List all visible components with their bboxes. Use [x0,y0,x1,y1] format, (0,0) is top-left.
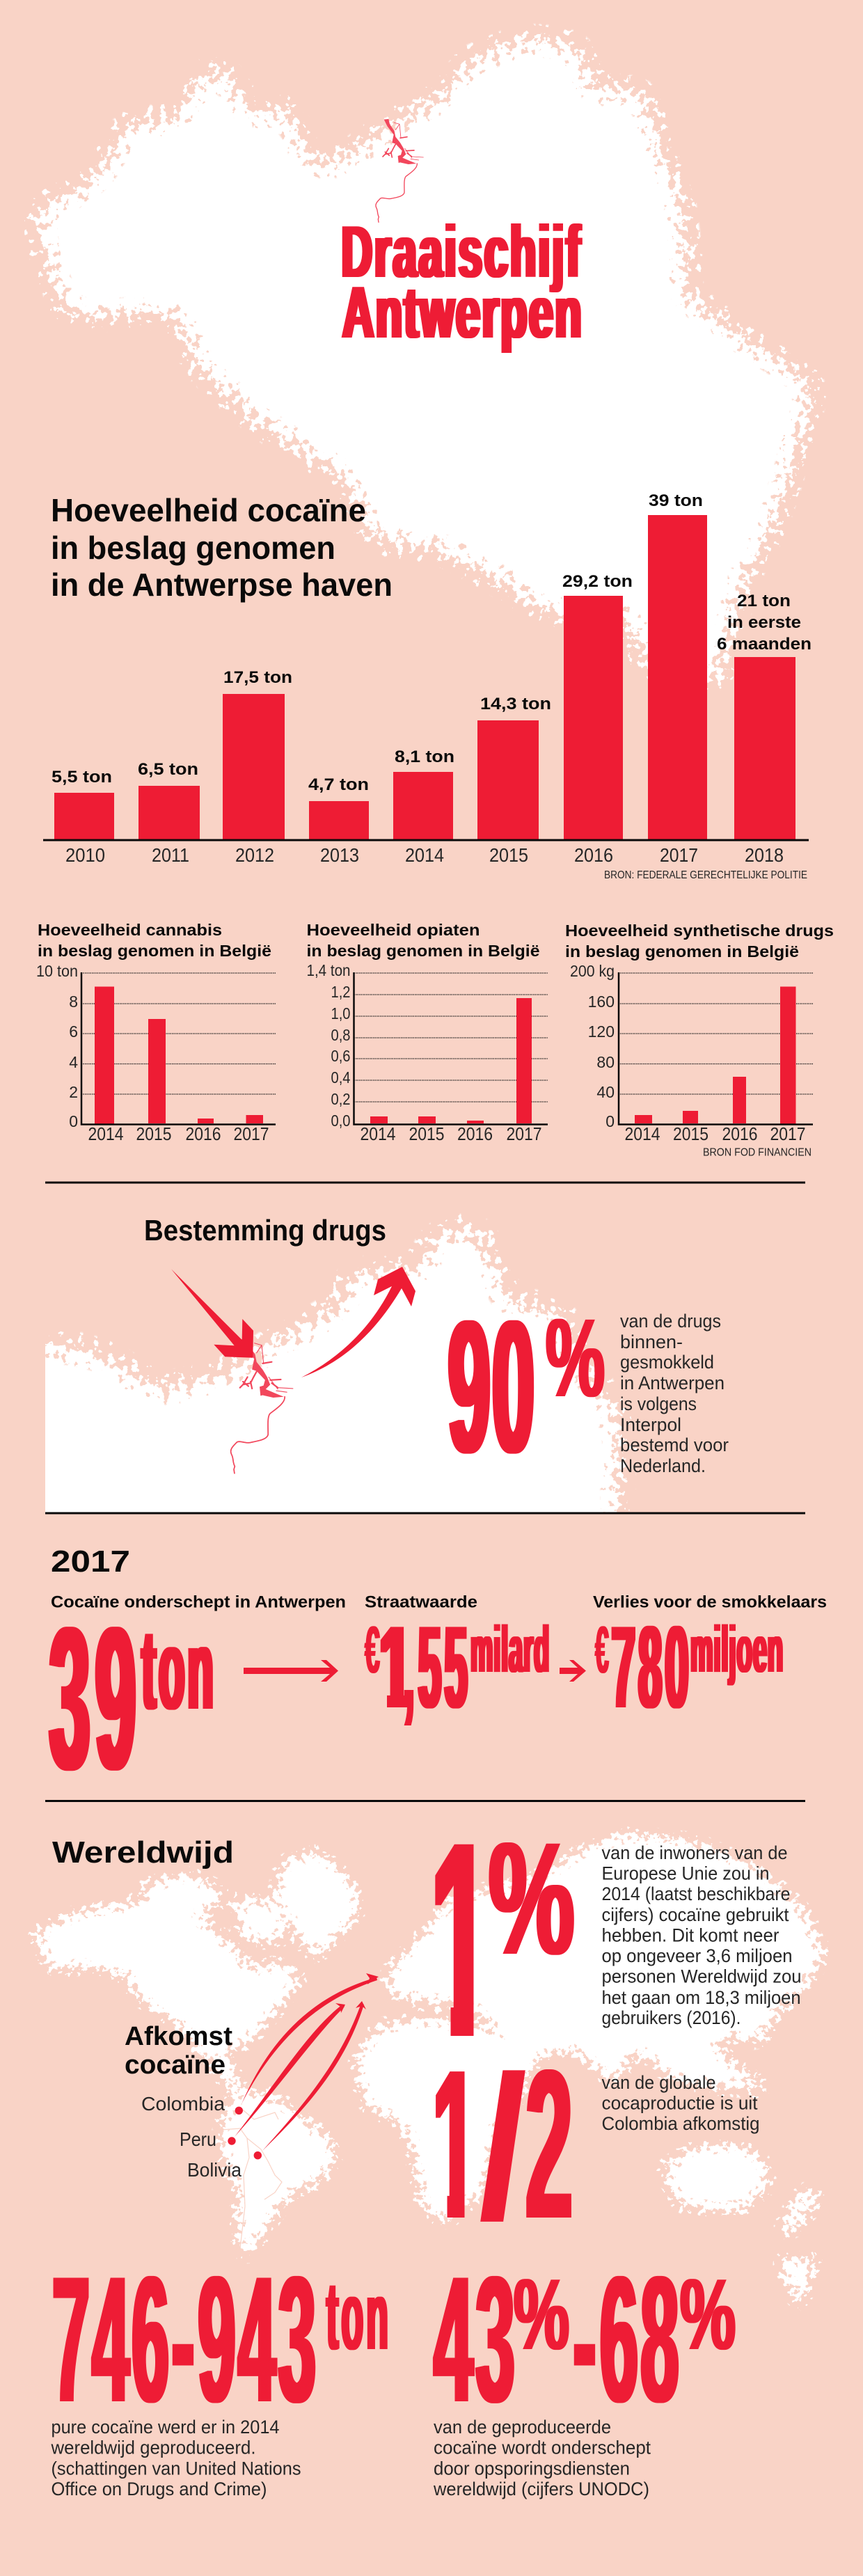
bar chart: cocaine seized in Antwerp harbour per year: 2015 [489,844,528,866]
stat: one half [436,2069,571,2222]
South America borders [221,2108,282,2248]
label: smugglers loss: Verlies voor de smokkelaars [593,1593,827,1612]
text: one half explanation: van de globale [601,2072,715,2093]
panel: opiates chart: 1,2 [331,983,351,1001]
stat: 90 percent: % [546,1295,605,1420]
bar chart: cocaine seized in Antwerp harbour per year: 2012 [235,844,274,866]
stat: 780 miljoen: € [595,1613,609,1687]
bar chart: cocaine seized in Antwerp harbour per year: 2010 [65,844,105,866]
panel: opiates chart: 2014 [361,1123,395,1144]
panel: synthetic drugs chart: 2014 [625,1123,660,1144]
text: ton [142,1605,216,1733]
panel: cannabis chart: in beslag genomen in België [38,942,271,960]
label: Bolivia: Bolivia [187,2159,242,2181]
panel: cannabis chart: 0 [69,1112,78,1130]
title [342,211,583,354]
text: cocaine intercepted share [433,2417,651,2499]
panel: opiates chart: Hoeveelheid opiaten [306,921,480,939]
panel: synthetic drugs chart: 2017 [770,1123,806,1144]
panel: synthetic drugs chart: 120 [588,1022,615,1041]
map: Belgium white silhouette [35,38,814,688]
stat: 1,55 milard: 55 [418,1602,470,1732]
stat: one half: / [481,2034,525,2261]
bar chart: cocaine seized in Antwerp harbour per year: 39 ton [649,491,703,510]
heading: origin of cocaine: cocaïne [125,2050,225,2080]
panel: synthetic drugs chart: 2015 [673,1123,708,1144]
heading: cocaine seizures: Hoeveelheid cocaïne [51,492,366,528]
bar chart: cocaine seized in Antwerp harbour per year: 2018 [745,844,784,866]
text: cocaine intercepted share: cocaïne wordt onderschept [434,2437,651,2458]
panel: opiates chart: 1,4 ton [306,961,351,979]
text: one half explanation: cocaproductie is uit [601,2092,758,2113]
map: world silhouette [33,1834,825,2309]
label: street value: Straatwaarde [365,1593,477,1612]
panel: opiates chart: 0,4 [331,1068,351,1086]
text: cocaine produced: wereldwijd geproduceerd. [51,2437,255,2458]
text: cocaine intercepted share: door opsporingsdiensten [434,2458,630,2479]
text: 1 percent explanation: gebruikers (2016). [601,2007,741,2028]
stat: 1,55 milard: , [402,1602,415,1732]
text: cocaine produced: pure cocaïne werd er in 2014 [52,2417,280,2437]
panel: opiates chart: 0,2 [331,1090,351,1108]
panel: synthetic drugs chart: 0 [605,1112,615,1130]
stat: 43-68 percent: % [514,2258,569,2371]
heading: cocaine seizures: in beslag genomen [51,530,335,566]
text: 1 percent explanation: cijfers) cocaïne gebruikt [601,1904,789,1925]
panel: synthetic drugs chart [565,922,834,1144]
heading: origin of cocaine: Afkomst [125,2022,232,2051]
title: Antwerpen [342,271,583,354]
panel: synthetic drugs chart: 200 kg [570,962,615,980]
panel: synthetic drugs chart: in beslag genomen in België [565,942,799,961]
arrows: origin routes to Europe [228,1973,379,2159]
bar chart: cocaine seized in Antwerp harbour per year: 4,7 ton [308,775,369,794]
panel: cannabis chart: 2014 [88,1123,124,1144]
heading: cocaine seizures [51,492,393,603]
panel: synthetic drugs chart: 160 [588,993,615,1011]
text: one half explanation: Colombia afkomstig [601,2113,760,2134]
bar chart: cocaine seized in Antwerp harbour per year: 6 maanden [717,635,811,654]
stat: 39 ton: 39 [49,1585,141,1812]
panel: cannabis chart: 10 ton [36,962,78,980]
stat: 1 percent: 1 [430,1784,492,2095]
text: 1 percent explanation: van de inwoners van de [601,1842,788,1863]
text: 1 percent explanation: hebben. Dit komt neer [601,1925,779,1946]
panel: opiates chart: 2017 [507,1123,541,1144]
stat: 746-943 ton: 746 [52,2238,171,2440]
text: 90 percent explanation [620,1311,729,1476]
text: cocaine produced: Office on Drugs and Crime) [52,2479,267,2499]
stat: 780 miljoen: 780 [612,1602,692,1732]
source: federal police: BRON: FEDERALE GERECHTELIJKE POLITIE [604,869,807,881]
text: cocaine intercepted share: wereldwijd (cijfers UNODC) [433,2479,649,2499]
text: 1 percent explanation: op ongeveer 3,6 miljoen [601,1945,792,1966]
map: Belgium close-up for destination [45,1213,638,1512]
label: cocaine intercepted: Cocaïne onderschept in Antwerpen [51,1593,346,1612]
bar chart: cocaine seized in Antwerp harbour per year: 14,3 ton [480,695,551,713]
panel: synthetic drugs chart: 40 [596,1083,615,1101]
stat: 1 percent [435,1842,574,2036]
panel: opiates chart: 2016 [457,1123,493,1144]
stat: 1 percent: % [489,1809,575,1988]
panel: synthetic drugs chart: 2016 [722,1123,757,1144]
stat: 43-68 percent: 68 [600,2238,681,2440]
stat: 43-68 percent: % [680,2258,736,2371]
text: 90 percent explanation: Nederland. [620,1455,706,1476]
heading: destination: Bestemming drugs [144,1214,386,1247]
bar chart: cocaine seized in Antwerp harbour per year: 5,5 ton [52,768,112,787]
text: one half explanation [601,2072,760,2134]
text: 90 percent explanation: van de drugs [620,1311,721,1332]
text: cocaine intercepted share: van de geproduceerde [434,2417,611,2437]
panel: cannabis chart: 6 [69,1022,78,1041]
text: 1 percent explanation: het gaan om 18,3 miljoen [601,1987,800,2008]
panel: cannabis chart: 8 [69,993,78,1011]
panel: synthetic drugs chart: 80 [596,1053,615,1071]
text: 90 percent explanation: binnen- [620,1332,683,1352]
panel: synthetic drugs chart: Hoeveelheid synthetische drugs [565,922,834,940]
stat: 1,55 milard: 1 [379,1602,412,1732]
panel: opiates chart: in beslag genomen in België [306,942,540,960]
arrow: street value to loss [560,1660,586,1682]
panel: cannabis chart: 2016 [185,1123,221,1144]
text: milard [470,1613,550,1686]
arrow: drugs into Antwerp [171,1269,253,1358]
bar chart: cocaine seized in Antwerp harbour per year: 8,1 ton [395,748,454,766]
stat: 746-943 ton: 943 [198,2238,319,2440]
panel: cannabis chart: Hoeveelheid cannabis [38,921,222,939]
heading: cocaine seizures: in de Antwerpse haven [51,567,393,603]
stat: 1,55 milard [364,1625,549,1725]
heading: origin of cocaine [125,2022,232,2080]
bar chart: cocaine seized in Antwerp harbour per year: in eerste [727,613,801,632]
panel: opiates chart: 1,0 [331,1004,351,1022]
bar chart: cocaine seized in Antwerp harbour per year: 21 ton [737,592,791,610]
text: 90 percent explanation: gesmokkeld [620,1352,714,1373]
stat: 1,55 milard: € [365,1613,380,1687]
label: Colombia: Colombia [141,2093,225,2115]
panel: opiates chart: 0,0 [331,1112,351,1130]
panel: cannabis chart: 2 [69,1083,78,1101]
panel: cannabis chart: 2015 [136,1123,171,1144]
title: Draaischijf [342,211,583,293]
panel: cannabis chart: 4 [69,1053,78,1071]
stat: 746-943 ton: - [172,2238,194,2440]
bar chart: cocaine seized in Antwerp harbour per year: 2013 [320,844,359,866]
bar chart: cocaine seized in Antwerp harbour per year [43,491,811,866]
text: 1 percent explanation: 2014 (laatst beschikbare [601,1883,791,1904]
bar chart: cocaine seized in Antwerp harbour per year: 2017 [660,844,698,866]
text: 90 percent explanation: is volgens [620,1393,697,1414]
text: 90 percent explanation: Interpol [620,1414,681,1435]
text: 1 percent explanation: Europese Unie zou in [601,1863,770,1883]
bar chart: cocaine seized in Antwerp harbour per year: 2011 [152,844,189,866]
panel: cannabis chart: 2017 [234,1123,269,1144]
text: cocaine produced: (schattingen van United Nations [52,2458,301,2479]
heading: Wereldwijd: Wereldwijd [52,1835,234,1870]
bar chart: cocaine seized in Antwerp harbour per year: 29,2 ton [562,572,633,591]
stat: 43-68 percent: - [573,2238,596,2440]
bar chart: cocaine seized in Antwerp harbour per year: 2014 [405,844,444,866]
text: 1 percent explanation [601,1842,802,2028]
stat: 39 ton [49,1585,216,1812]
arrow: 39 ton to street value [244,1660,338,1682]
panel: opiates chart: 2015 [409,1123,444,1144]
icon: Scheldt river close-up [231,1338,293,1473]
icon: Scheldt river and Antwerp harbour [376,119,423,222]
heading: 2017: 2017 [51,1544,130,1579]
bar chart: cocaine seized in Antwerp harbour per year: 6,5 ton [138,760,198,779]
text: 90 percent explanation: bestemd voor [620,1435,729,1455]
panel: opiates chart: 0,6 [331,1047,351,1065]
text: ton [326,2261,391,2370]
bar chart: cocaine seized in Antwerp harbour per year: 17,5 ton [223,668,292,687]
arrow: drugs out to the Netherlands [301,1267,415,1377]
text: 2 [525,2025,573,2263]
panel: opiates chart: 0,8 [331,1026,351,1044]
stat: 43-68 percent: 43 [434,2238,517,2440]
panel: cannabis chart [36,921,276,1144]
stat: one half: 1 [432,2025,478,2263]
text: 1 percent explanation: personen Wereldwijd zou [601,1966,802,1986]
stat: 90 percent: 90 [448,1282,537,1492]
bar chart: cocaine seized in Antwerp harbour per year: 2016 [574,844,613,866]
source: FOD Financien: BRON FOD FINANCIEN [703,1147,811,1158]
text: 90 percent explanation: in Antwerpen [620,1373,725,1393]
label: Peru: Peru [180,2128,216,2150]
panel: opiates chart [306,921,548,1144]
text: cocaine produced [51,2417,301,2499]
